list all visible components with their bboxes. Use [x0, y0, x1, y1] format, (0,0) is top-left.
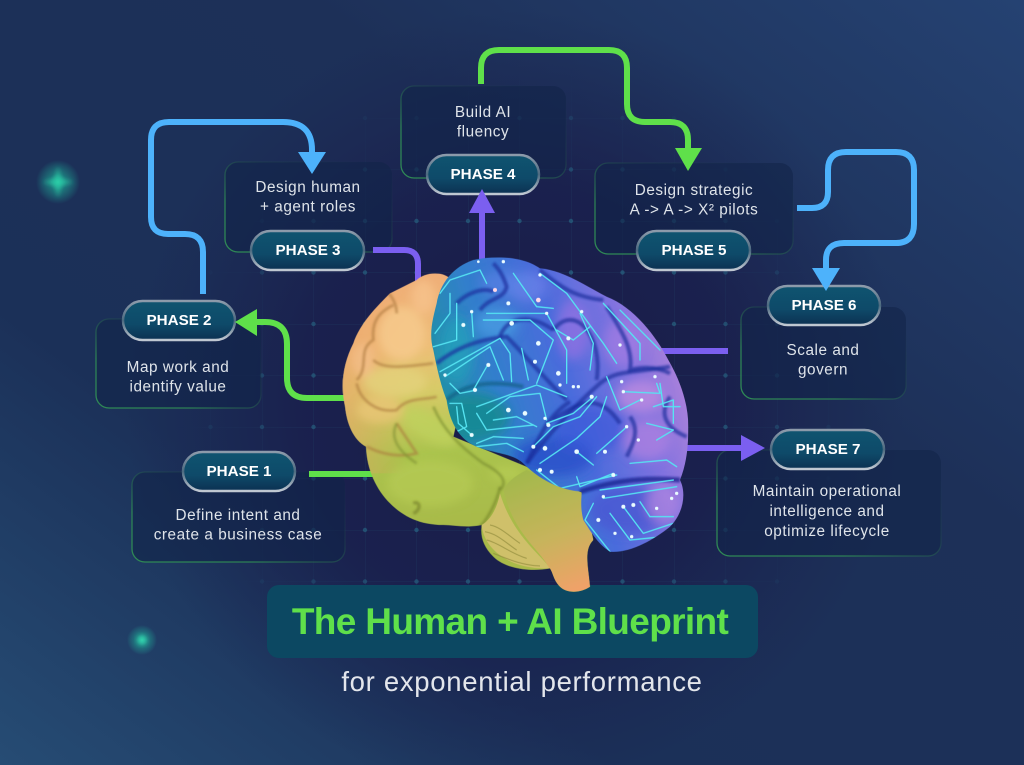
arrow: phase 6 connector [660, 348, 728, 354]
phase 5 description: Design strategic [635, 182, 753, 199]
pill: phase 5: PHASE 5 [662, 242, 727, 259]
pill: phase 4: PHASE 4 [450, 166, 516, 183]
phase 6 description: Scale and [786, 342, 860, 359]
icon: green glow star top left [36, 160, 80, 204]
pill: phase 3: PHASE 3 [276, 242, 340, 259]
panel: phase 1 [132, 472, 345, 562]
pill: phase 7: PHASE 7 [796, 441, 860, 458]
phase 1 description: create a business case [154, 526, 322, 544]
phase 7 description: Maintain operational [753, 483, 901, 500]
pill: phase 3 [251, 231, 364, 270]
brain: blue circuit hemisphere [423, 250, 697, 560]
phase 7 description: optimize lifecycle [764, 523, 890, 540]
phase 4 description: fluency [457, 124, 509, 140]
brain illustration [340, 250, 697, 600]
arrow: phase 1 connector [309, 471, 376, 477]
arrow: phase 2 to phase 3 [151, 122, 326, 294]
phase 1 description: Define intent and [175, 507, 301, 524]
phase 4 description: Build AI [455, 104, 511, 121]
phase 2 description: identify value [130, 378, 226, 396]
phase 3 description: + agent roles [260, 198, 356, 216]
pill: phase 2: PHASE 2 [146, 312, 212, 329]
subtitle: for exponential performance [341, 666, 703, 697]
brain: sulci folds [437, 263, 687, 492]
phase 2 description: Map work and [127, 359, 229, 376]
pill: phase 6: PHASE 6 [792, 297, 856, 314]
arrow: phase 4 connector [469, 189, 495, 260]
title box [267, 585, 758, 658]
panel: phase 7 [717, 450, 941, 556]
arrow: phase 2 connector [235, 309, 346, 398]
panel: phase 5 [595, 163, 793, 254]
icon: green glow star bottom left [127, 625, 157, 655]
panel: phase 2 [96, 319, 261, 408]
pill: phase 7 [771, 430, 884, 469]
brain: warm rear lobes [340, 267, 607, 600]
brain: cerebellum folds lower stem [482, 493, 550, 568]
pill: phase 4 [427, 155, 539, 194]
arrow: phase 3 connector [373, 250, 418, 281]
pill: phase 1 [183, 452, 295, 491]
pill: phase 5 [637, 231, 750, 270]
panel: phase 3 [225, 162, 392, 252]
phase 5 description: A -> A -> X² pilots [630, 202, 758, 218]
panel: phase 6 [741, 307, 906, 399]
phase 3 description: Design human [255, 179, 361, 196]
brain: glowing nodes [443, 260, 678, 538]
arrow: phase 5 to phase 6 [797, 152, 914, 291]
pill: phase 6 [768, 286, 880, 325]
arrow: phase 7 connector [680, 435, 765, 461]
pill: phase 1: PHASE 1 [206, 463, 272, 480]
pill: phase 2 [123, 301, 235, 340]
title: The Human + AI Blueprint [292, 601, 728, 642]
phase 6 description: govern [798, 362, 848, 378]
phase 7 description: intelligence and [769, 503, 885, 520]
arrow: phase 4 to phase 5 [481, 50, 702, 171]
panel: phase 4 [401, 86, 566, 178]
brain: circuit traces [433, 270, 680, 552]
